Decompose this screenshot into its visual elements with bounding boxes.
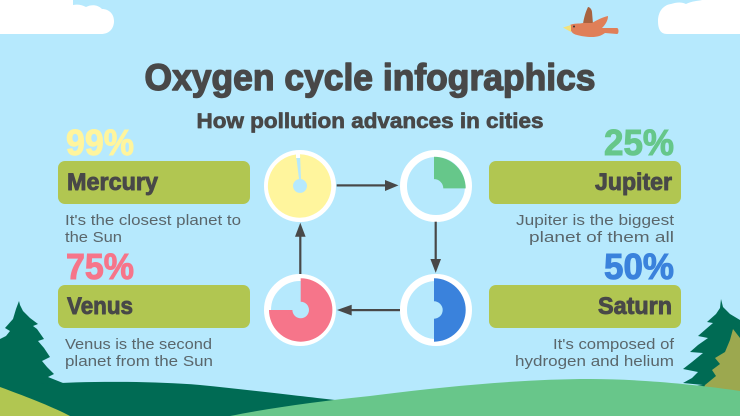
cloud: top right [658, 0, 740, 34]
icon: bird [563, 7, 618, 37]
percentage: jupiter: 25% [604, 122, 674, 163]
percentage: saturn: 50% [604, 246, 674, 287]
hill: light green [230, 379, 740, 416]
arrow: saturn to venus [337, 305, 400, 316]
tree: right olive [700, 329, 740, 396]
donut: 25% green [404, 154, 468, 218]
panel: venus [58, 246, 250, 370]
hill: olive [0, 387, 70, 416]
arrow: mercury to jupiter [337, 180, 398, 191]
arrow: venus to mercury [295, 223, 306, 274]
panel: mercury [58, 122, 250, 246]
label: saturn: Saturn [598, 293, 672, 320]
label bar: mercury [58, 161, 250, 204]
label: jupiter: Jupiter [595, 169, 672, 196]
description: saturn: hydrogen and helium [515, 353, 674, 370]
description: jupiter: planet of them all [529, 229, 674, 246]
donut: 75% pink [268, 278, 332, 342]
label: mercury: Mercury [67, 169, 159, 196]
description: venus: Venus is the second [65, 336, 212, 353]
description: jupiter: Jupiter is the biggest [516, 212, 675, 229]
description: saturn: It's composed of [553, 336, 675, 353]
percentage: venus: 75% [66, 246, 134, 287]
label bar: venus [58, 285, 250, 328]
tree: right dark [683, 299, 740, 392]
hill: dark green [40, 382, 335, 416]
subtitle: How pollution advances in cities [196, 110, 544, 133]
cloud: top left [0, 0, 114, 34]
donut: 50% blue [404, 278, 468, 342]
title: Oxygen cycle infographics [144, 57, 596, 98]
description: venus: planet from the Sun [65, 353, 213, 370]
panel: jupiter [489, 122, 681, 246]
donut: 99% yellow [268, 153, 332, 218]
tree: left [0, 301, 63, 416]
label: venus: Venus [67, 293, 133, 320]
description: mercury: the Sun [65, 229, 122, 246]
arrow: jupiter to saturn [430, 222, 441, 273]
label bar: jupiter [489, 161, 681, 204]
description: mercury: It's the closest planet to [65, 212, 241, 229]
label bar: saturn [489, 285, 681, 328]
percentage: mercury: 99% [66, 122, 134, 163]
panel: saturn [489, 246, 681, 370]
